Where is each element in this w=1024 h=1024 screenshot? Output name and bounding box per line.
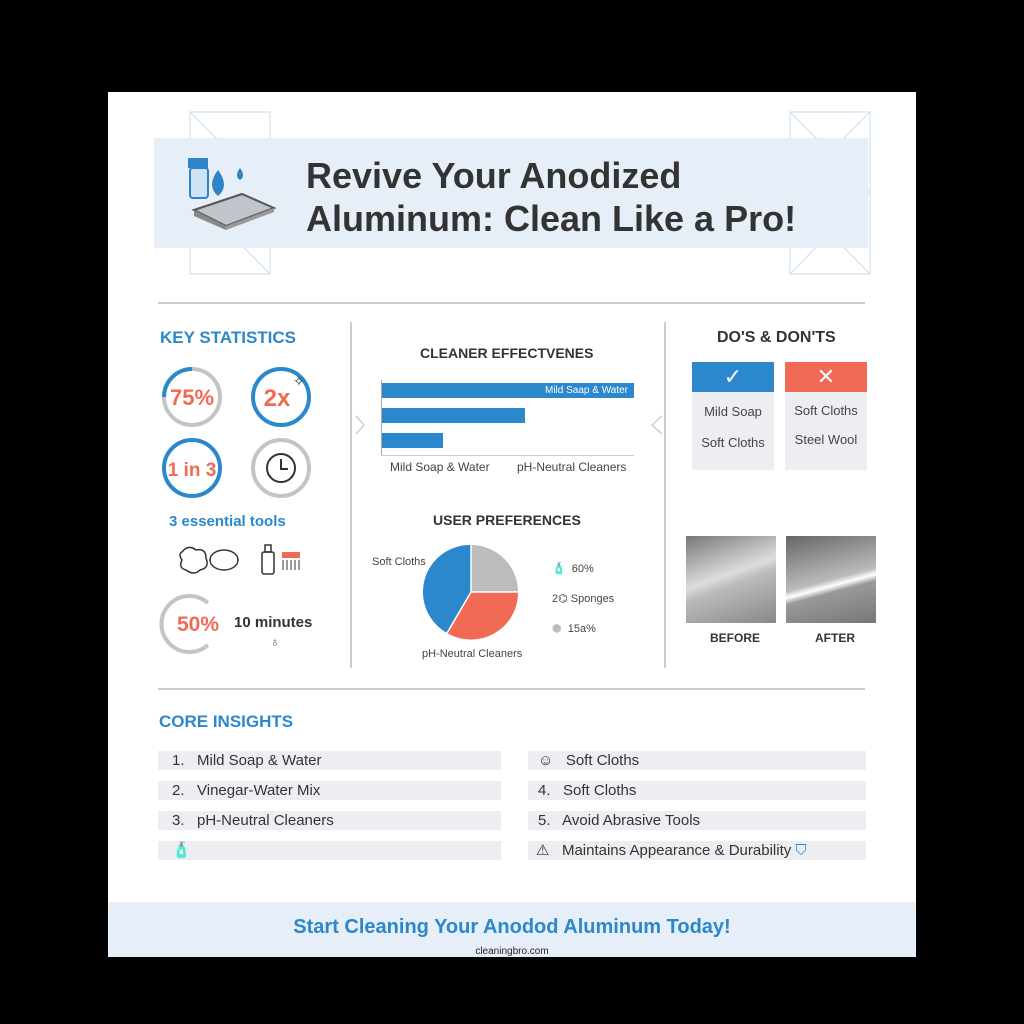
stat circles: 1 in 3 xyxy=(168,460,216,481)
stat circles: 10 minutes xyxy=(234,614,312,631)
stat circles: 50% xyxy=(177,613,219,636)
legend xyxy=(552,562,614,635)
stat circles: 2x xyxy=(264,385,291,412)
heading: core insights: CORE INSIGHTS xyxy=(159,712,293,731)
do column: ✓ xyxy=(724,364,742,389)
icon: cleaning spray and plate xyxy=(188,158,276,230)
stat circles: ♁ xyxy=(270,634,280,649)
insights list: 4. Soft Cloths xyxy=(538,782,636,799)
title: Revive Your Anodized xyxy=(306,155,681,196)
dont column xyxy=(785,362,867,470)
text: 3 essential tools: 3 essential tools xyxy=(169,513,286,530)
legend: 2⌬ Sponges xyxy=(552,593,614,605)
panel: user preferences: Soft Cloths xyxy=(372,556,426,568)
do column xyxy=(692,362,774,470)
bars: Mild Saap & Water xyxy=(545,385,628,396)
stat circles: ✧ xyxy=(293,373,305,389)
panel: cleaner effectiveness chart: pH-Neutral Cleaners xyxy=(517,460,626,474)
pie chart xyxy=(423,545,518,640)
insights list: ☺ Soft Cloths xyxy=(538,752,639,769)
panel: user preferences xyxy=(372,512,614,660)
panel: cleaner effectiveness chart xyxy=(381,345,634,474)
panel: dos and donts xyxy=(686,329,876,645)
legend: 🧴 60% xyxy=(552,563,594,575)
bars xyxy=(382,383,634,398)
text: Start Cleaning Your Anodod Aluminum Today! xyxy=(293,916,731,938)
insights list: 2. Vinegar-Water Mix xyxy=(172,782,320,799)
heading: KEY STATISTICS xyxy=(160,328,296,347)
panel: user preferences: pH-Neutral Cleaners xyxy=(422,648,522,660)
insights list: 5. Avoid Abrasive Tools xyxy=(538,812,700,829)
card xyxy=(108,92,916,957)
dividers xyxy=(158,302,865,304)
arrows on dividers xyxy=(356,416,662,434)
dont column: ✕ xyxy=(817,364,835,389)
panel: key statistics xyxy=(160,328,312,654)
do column: Mild Soap xyxy=(704,404,762,419)
legend: ⬢ 15a% xyxy=(552,623,596,635)
header band xyxy=(154,138,868,248)
dont column: Steel Wool xyxy=(795,432,857,447)
footer url: cleaningbro.com xyxy=(475,946,549,957)
heading: DO'S & DON'TS xyxy=(717,329,836,346)
insights list: 3. pH-Neutral Cleaners xyxy=(172,812,334,829)
panel: dos and donts: AFTER xyxy=(815,631,855,645)
insights list xyxy=(158,751,866,860)
do column: Soft Cloths xyxy=(701,435,765,450)
stat circles xyxy=(160,367,312,654)
title xyxy=(306,155,796,239)
panel: dos and donts: BEFORE xyxy=(710,631,760,645)
heading: CLEANER EFFECTVENES xyxy=(420,345,593,361)
insights list: 🧴 xyxy=(172,842,191,859)
insights list: ⚠ Maintains Appearance & Durability ⛉ xyxy=(536,842,807,859)
insights list: 1. Mild Soap & Water xyxy=(172,752,322,769)
icons: tools xyxy=(179,544,300,575)
panel: cleaner effectiveness chart: Mild Soap & Water xyxy=(390,460,490,474)
stat circles: 75% xyxy=(170,385,214,410)
before/after images xyxy=(686,536,776,623)
title: Aluminum: Clean Like a Pro! xyxy=(306,198,796,239)
footer banner xyxy=(108,902,916,957)
heading: USER PREFERENCES xyxy=(433,512,581,528)
dont column: Soft Cloths xyxy=(794,403,858,418)
